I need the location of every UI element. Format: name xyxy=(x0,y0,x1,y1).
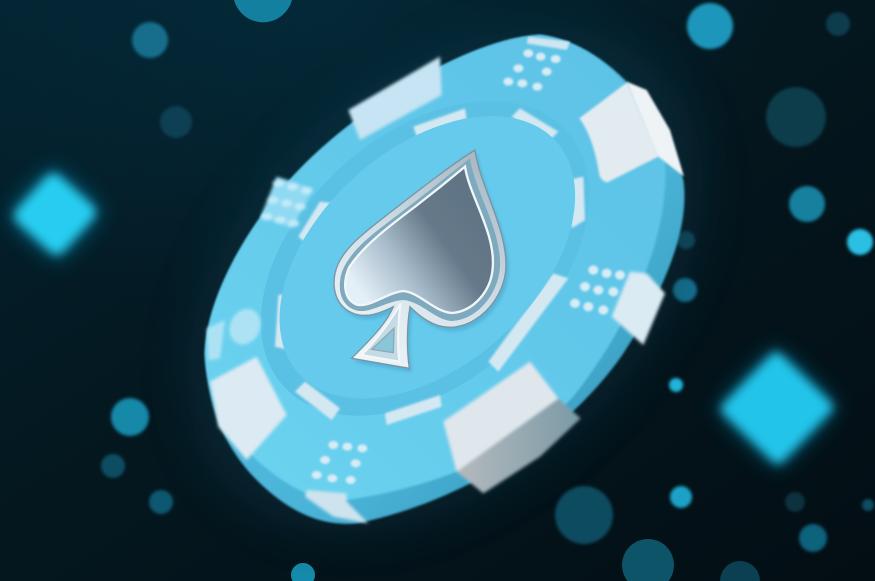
patch: upper right xyxy=(579,82,684,182)
patch: lower right xyxy=(443,362,581,493)
inner ring xyxy=(200,39,650,478)
patch: top rim xyxy=(527,37,570,50)
dice dots: left faded xyxy=(261,177,313,228)
inner disc xyxy=(226,61,629,454)
spade outer bevel xyxy=(334,150,506,368)
chip rim xyxy=(205,35,684,524)
faded number on chip edge xyxy=(207,304,266,361)
patch: upper left xyxy=(348,57,442,140)
poker chip xyxy=(200,35,684,524)
glowing diamond right xyxy=(719,350,835,466)
patch: lower left xyxy=(210,357,287,460)
dice dots: right xyxy=(570,265,625,315)
chip face xyxy=(205,35,665,500)
ring white dashes xyxy=(275,108,585,425)
glowing diamond left xyxy=(8,167,102,261)
spade stem window xyxy=(372,328,394,353)
spade xyxy=(334,150,509,372)
dice dots: bottom xyxy=(312,441,367,484)
patch: right xyxy=(612,272,665,345)
spade inner face xyxy=(345,167,493,313)
spade shadow xyxy=(337,154,509,372)
spade middle groove xyxy=(340,158,500,321)
dice dots: top xyxy=(503,49,561,91)
spade stem inner xyxy=(362,303,401,362)
patch: bottom rim xyxy=(305,490,368,523)
